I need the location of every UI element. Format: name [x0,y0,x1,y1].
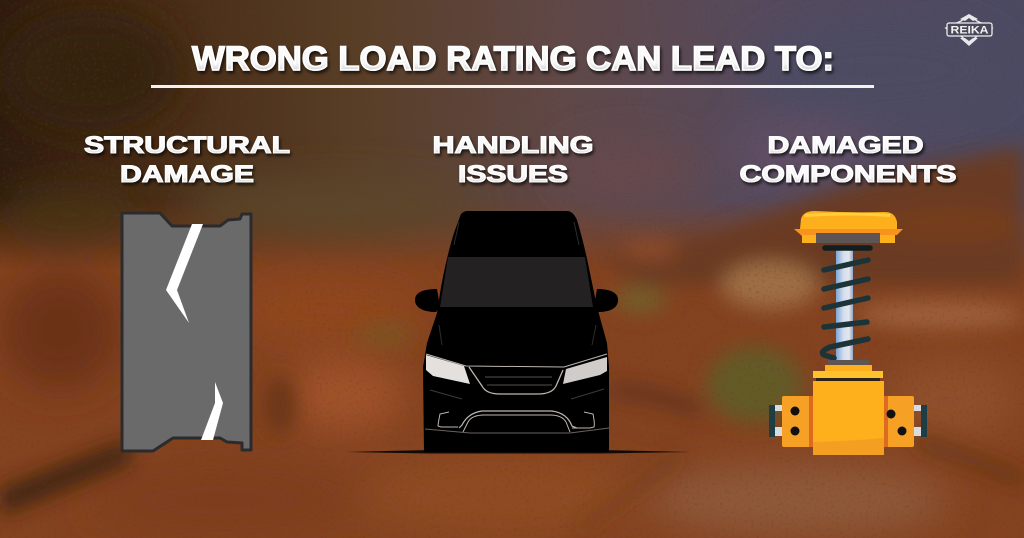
logo: REIKA [946,14,992,46]
logo: REIKA: REIKA [950,24,989,36]
heading: handling issues: HANDLING [432,132,594,159]
heading: damaged components: DAMAGED [768,132,924,159]
left headlight [426,355,470,384]
title: WRONG LOAD RATING CAN LEAD TO: [192,40,834,78]
crack: upper [166,224,203,323]
heading: structural damage: DAMAGE [120,161,254,188]
ground shadow line [346,450,690,454]
heading: structural damage: STRUCTURAL [84,132,290,159]
heading: handling issues: ISSUES [458,161,568,188]
windshield [440,257,593,307]
heading: damaged components [740,132,956,188]
heading: structural damage [84,132,290,188]
cylinder cap [813,371,883,378]
piston rod [836,250,853,362]
right bracket [884,396,927,447]
top mount [800,211,897,229]
icon: black van front view [346,211,690,454]
grille and trim lines [425,222,609,433]
spring seat [825,365,872,371]
left bracket [769,396,813,447]
heading: damaged components: COMPONENTS [740,161,956,188]
icon: yellow suspension strut [769,211,927,455]
van body [423,211,609,452]
icon: cracked wheel rim [122,213,251,451]
crack: lower [201,382,223,440]
heading: handling issues [432,132,594,188]
coil spring [822,248,870,358]
mirror: right [594,289,618,312]
cylinder body [813,381,884,455]
mirror: left [415,289,440,312]
right headlight [563,357,607,384]
title underline [151,85,874,88]
